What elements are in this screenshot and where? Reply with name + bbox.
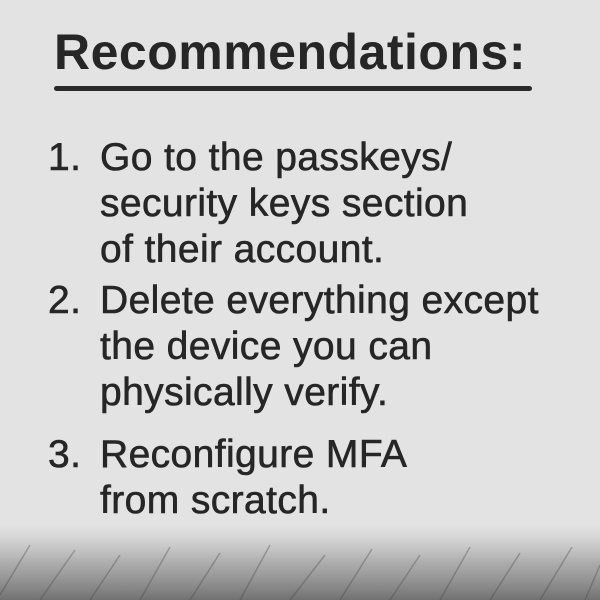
item 1 [48,136,468,271]
item 1: 1. [48,136,81,179]
decorative grass shading [0,532,600,600]
item 2: 2. [48,279,81,322]
item 1: of their account. [100,228,384,271]
item 2 [48,279,539,414]
item 3: from scratch. [100,479,331,522]
item 3 [48,433,408,522]
item 1: Go to the passkeys/ [100,136,452,179]
item 2: the device you can [100,325,432,368]
item 2: physically verify. [100,371,388,414]
item 2: Delete everything except [100,279,539,322]
item 3: Reconfigure MFA [100,433,407,476]
item 3: 3. [48,433,81,476]
item 1: security keys section [100,182,468,225]
title: Recommendations: [54,24,526,80]
